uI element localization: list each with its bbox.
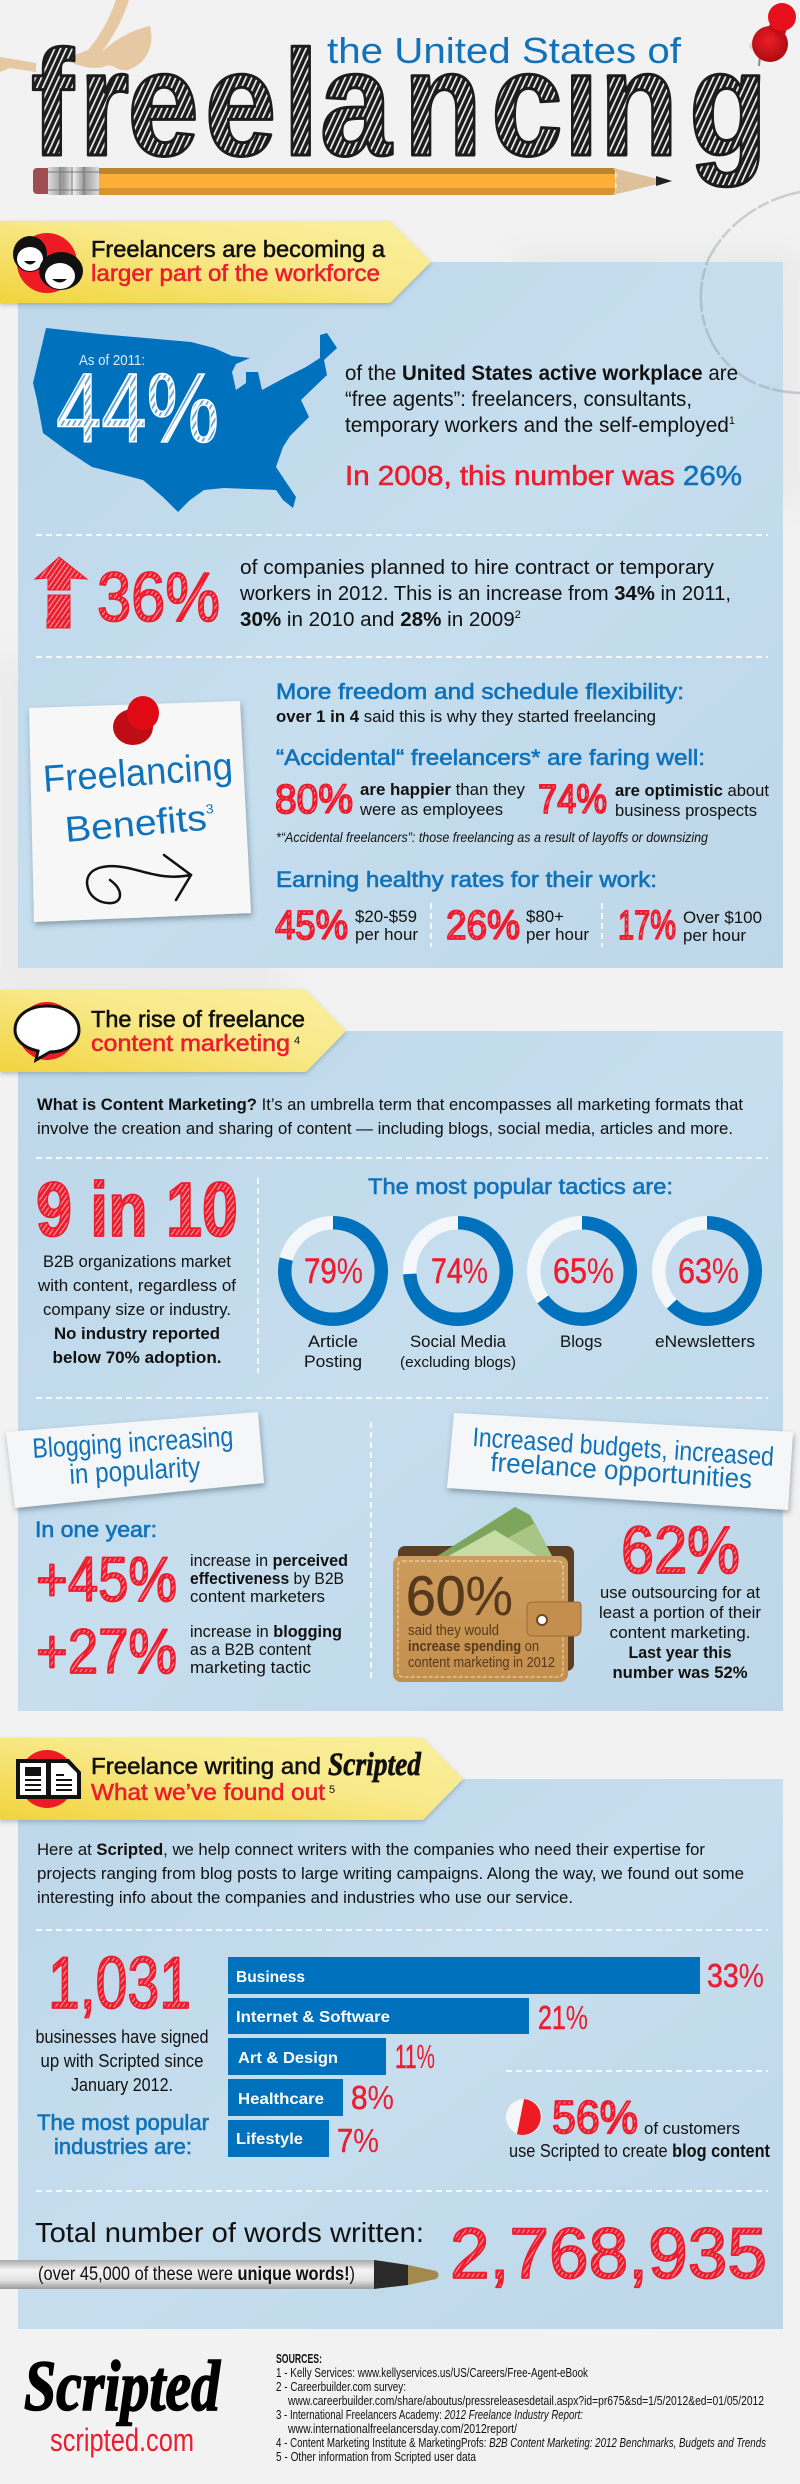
- intro paragraph: involve the creation and sharing of content — including blogs, social media, articles and more.: [37, 1119, 733, 1138]
- sources: SOURCES:: [276, 2351, 322, 2366]
- benefit: earning rates: per hour: [526, 925, 589, 944]
- benefit: freedom: over 1 in 4 said this is why they started freelancing: [276, 707, 656, 726]
- stat plus 45: effectiveness by B2B: [190, 1569, 344, 1588]
- note: freelancing benefits: Benefits: [63, 798, 196, 850]
- benefit: earning rates: $20-$59: [355, 907, 417, 926]
- benefit: freedom: More freedom and schedule flexibility:: [276, 679, 684, 704]
- adoption text: company size or industry.: [43, 1300, 231, 1319]
- bar: lifestyle: [228, 2120, 379, 2159]
- chart: article posting: [285, 1223, 381, 1371]
- bar: lifestyle: Lifestyle: [236, 2131, 303, 2148]
- sources: 3 - International Freelancers Academy: 2012 Freelance Industry Report:: [276, 2407, 583, 2422]
- banner: workforce heading: [0, 221, 431, 303]
- icon: pencil: [33, 167, 672, 195]
- adoption text: B2B organizations market: [43, 1252, 231, 1271]
- tactics heading: The most popular tactics are:: [368, 1174, 673, 1199]
- stat plus 45: increase in perceived: [190, 1551, 348, 1570]
- note: freelancing benefits: 3: [205, 801, 214, 817]
- pie chart: [506, 2099, 542, 2135]
- logo: Scripted: [24, 2346, 221, 2426]
- main title: freelancing: freelancing: [31, 19, 768, 187]
- chart: social media: (excluding blogs): [400, 1354, 516, 1371]
- title: [32, 37, 760, 188]
- industries heading: [37, 2110, 209, 2159]
- icon: speech bubble: [15, 1002, 79, 1060]
- wallet clasp: [527, 1602, 581, 1636]
- 1,031 businesses: 1,031: [48, 1943, 191, 2024]
- industries heading: industries are:: [54, 2134, 192, 2159]
- 44 percent: 44%: [56, 353, 219, 463]
- intro paragraph: [37, 1095, 743, 1138]
- intro paragraph: projects ranging from blog posts to large writing campaigns. Along the way, we found out some: [37, 1864, 744, 1883]
- stat plus 27: increase in blogging: [190, 1622, 342, 1641]
- description: free agents: temporary workers and the self-employed: [345, 414, 731, 437]
- banner: content marketing heading: [0, 990, 346, 1072]
- 1,031 businesses: January 2012.: [71, 2075, 173, 2095]
- note: blogging: [6, 1412, 264, 1508]
- note: blogging: in popularity: [68, 1451, 201, 1490]
- description: hiring: [239, 557, 731, 631]
- description: hiring: workers in 2012. This is an increase from 34% in 2011,: [239, 583, 731, 605]
- bar chart: industries: [228, 1957, 764, 2159]
- footer: [24, 2346, 766, 2464]
- wallet text: increase spending on: [408, 1638, 539, 1655]
- stat plus 27: as a B2B content: [190, 1640, 311, 1659]
- coffee stain: [0, 0, 151, 72]
- as of label: As of 2011:: [79, 352, 145, 369]
- description: hiring: of companies planned to hire contract or temporary: [240, 557, 714, 579]
- benefit: accidental freelancers: are happier than they: [360, 780, 525, 799]
- panel: workforce: [18, 192, 800, 968]
- stat 74 percent: 74%: [538, 776, 607, 822]
- map of the United States: [33, 328, 337, 512]
- stat 56 percent: [506, 2091, 770, 2161]
- banner text: [91, 236, 385, 286]
- 1,031 businesses: [36, 1943, 208, 2095]
- banner text: 4: [294, 1035, 300, 1047]
- chart: article posting: Article: [308, 1332, 358, 1351]
- stat 62 percent: least a portion of their: [599, 1603, 761, 1622]
- stat plus 45: content marketers: [190, 1587, 325, 1606]
- bar: internet and software: [228, 1998, 588, 2036]
- benefit: earning rates: [275, 867, 762, 948]
- stat 62 percent: Last year this: [628, 1643, 732, 1662]
- chart: blogs: Blogs: [560, 1332, 602, 1351]
- sources: [276, 2351, 766, 2464]
- total words label: Total number of words written:: [35, 2217, 424, 2248]
- description: free agents: of the United States active workplace are: [345, 362, 738, 385]
- panel: scripted: [0, 1779, 783, 2329]
- sources: 2 - Careerbuilder.com survey:: [276, 2379, 406, 2394]
- stat 62 percent: use outsourcing for at: [600, 1583, 760, 1602]
- benefit: accidental freelancers: are optimistic about: [615, 781, 769, 800]
- banner: scripted heading: [0, 1738, 463, 1820]
- adoption text: with content, regardless of: [37, 1276, 236, 1295]
- banner text: 5: [329, 1784, 335, 1796]
- stat 56 percent: 56%: [552, 2091, 638, 2143]
- stat plus 27: marketing tactic: [190, 1658, 312, 1677]
- intro paragraph: interesting info about the companies and industries who use our service.: [37, 1888, 573, 1907]
- stat 45 percent: 45%: [275, 902, 348, 948]
- wallet text: said they would: [408, 1622, 499, 1639]
- 1,031 businesses: businesses have signed: [36, 2027, 208, 2047]
- intro paragraph: [37, 1840, 744, 1907]
- chart: social media: [400, 1223, 516, 1371]
- bar: business: [228, 1957, 764, 1994]
- benefit: earning rates: per hour: [355, 925, 418, 944]
- stat 62 percent: [599, 1513, 761, 1682]
- benefit: freedom: [276, 679, 684, 726]
- description: free agents: “free agents”: freelancers, consultants,: [345, 388, 692, 411]
- sources: 1 - Kelly Services: www.kellyservices.us/US/Careers/Free-Agent-eBook: [276, 2365, 588, 2380]
- benefit: accidental freelancers: “Accidental“ freelancers* are faring well:: [276, 745, 705, 770]
- description: free agents: [345, 362, 738, 437]
- bar: art and design: Art & Design: [238, 2050, 338, 2067]
- benefit: earning rates: $80+: [526, 907, 564, 926]
- bar: business: 33%: [707, 1957, 764, 1994]
- icon: red arrow: [35, 557, 87, 628]
- benefit: earning rates: Earning healthy rates for their work:: [276, 867, 657, 892]
- stat plus 27: +27%: [36, 1617, 177, 1687]
- stat 17 percent: 17%: [618, 902, 676, 948]
- comparison 2008: In 2008, this number was 26%: [345, 460, 742, 491]
- wallet text: content marketing in 2012: [408, 1654, 555, 1671]
- bar: lifestyle: 7%: [337, 2122, 379, 2159]
- adoption text: [37, 1252, 236, 1367]
- note text: Freelancing: [42, 746, 234, 801]
- stat 62 percent: content marketing.: [610, 1623, 750, 1642]
- benefit: accidental freelancers: [275, 745, 769, 845]
- banner text: Freelancers are becoming a: [91, 236, 385, 262]
- bar: healthcare: [228, 2079, 394, 2116]
- adoption text: No industry reported: [54, 1324, 220, 1343]
- benefit: earning rates: Over $100: [683, 908, 762, 927]
- icon: open book: [16, 1750, 81, 1808]
- one year heading: In one year:: [35, 1517, 157, 1542]
- 9 in 10: 9 in 10: [36, 1167, 238, 1253]
- chart: social media: 74%: [431, 1252, 488, 1291]
- banner text: [91, 1006, 305, 1056]
- footnote: *“Accidental freelancers”: those freelancing as a result of layoffs or downsizing: [276, 829, 708, 845]
- subtitle: the United States of: [327, 30, 682, 71]
- stat 62 percent: 62%: [621, 1513, 740, 1588]
- icon: pushpin: [749, 3, 796, 66]
- note: freelancing benefits: [29, 696, 251, 922]
- bar: art and design: 11%: [395, 2038, 435, 2075]
- icon: wallet: [393, 1507, 581, 1682]
- icon: squiggle arrow: [87, 855, 191, 903]
- icon: note pin: [113, 696, 159, 745]
- stat 26 percent: 26%: [446, 902, 520, 948]
- bar: internet and software: 21%: [538, 1999, 588, 2036]
- bar: business: Business: [236, 1969, 305, 1986]
- note: blogging: Blogging increasing: [31, 1421, 234, 1464]
- industries heading: The most popular: [37, 2110, 209, 2135]
- total words number: 2,768,935: [450, 2215, 767, 2294]
- banner text: content marketing: [91, 1030, 290, 1056]
- chart: blogs: 65%: [553, 1252, 614, 1291]
- stat 56 percent: use Scripted to create blog content: [509, 2141, 770, 2161]
- chart: blogs: [534, 1223, 630, 1351]
- bar: art and design: [228, 2038, 435, 2075]
- note: budgets: [447, 1413, 793, 1510]
- chart: enewsletters: [655, 1223, 755, 1351]
- icon: marker: [0, 2260, 438, 2289]
- website: scripted.com: [50, 2422, 194, 2458]
- intro paragraph: What is Content Marketing? It’s an umbrella term that encompasses all marketing formats that: [37, 1095, 743, 1114]
- adoption text: below 70% adoption.: [52, 1348, 222, 1367]
- 1,031 businesses: up with Scripted since: [40, 2051, 204, 2071]
- 36 percent: 36%: [97, 558, 220, 636]
- chart: article posting: Posting: [304, 1352, 362, 1371]
- wallet text: [406, 1564, 555, 1671]
- banner text: larger part of the workforce: [91, 260, 380, 286]
- sources: www.internationalfreelancersday.com/2012report/: [287, 2421, 517, 2436]
- benefit: accidental freelancers: business prospects: [615, 801, 757, 820]
- banner text: The rise of freelance: [91, 1006, 305, 1032]
- note: budgets: freelance opportunities: [490, 1447, 753, 1494]
- bar: healthcare: Healthcare: [238, 2091, 324, 2108]
- coffee ring stain: [701, 192, 800, 393]
- bar: internet and software: Internet & Software: [236, 2009, 390, 2026]
- chart: social media: Social Media: [410, 1332, 507, 1351]
- banner text: What we’ve found out: [91, 1779, 326, 1805]
- chart: article posting: 79%: [304, 1252, 363, 1291]
- benefit: accidental freelancers: were as employees: [359, 800, 503, 819]
- icon: two faces: [13, 233, 83, 293]
- banner text: Scripted: [328, 1747, 421, 1783]
- stat 62 percent: number was 52%: [612, 1663, 748, 1682]
- banner text: [91, 1747, 421, 1805]
- stat 56 percent: of customers: [644, 2119, 740, 2138]
- marker text: (over 45,000 of these were unique words!): [38, 2264, 355, 2285]
- description: hiring: 30% in 2010 and 28% in 2009: [240, 609, 513, 631]
- chart: enewsletters: 63%: [678, 1252, 739, 1291]
- chart: enewsletters: eNewsletters: [655, 1332, 755, 1351]
- description: free agents: 1: [729, 415, 735, 427]
- wallet text: 60%: [406, 1564, 513, 1627]
- bar: healthcare: 8%: [351, 2079, 394, 2116]
- panel: content marketing: [6, 1031, 793, 1711]
- stat 80 percent: 80%: [275, 776, 353, 822]
- intro paragraph: Here at Scripted, we help connect writers with the companies who need their expertise for: [37, 1840, 705, 1859]
- sources: 5 - Other information from Scripted user data: [276, 2449, 477, 2464]
- stat plus 45: [36, 1545, 348, 1615]
- stat plus 27: [36, 1617, 342, 1687]
- benefit: earning rates: per hour: [683, 926, 746, 945]
- stat plus 45: +45%: [36, 1545, 177, 1615]
- description: hiring: 2: [515, 609, 521, 621]
- banner text: Freelance writing and: [91, 1753, 321, 1779]
